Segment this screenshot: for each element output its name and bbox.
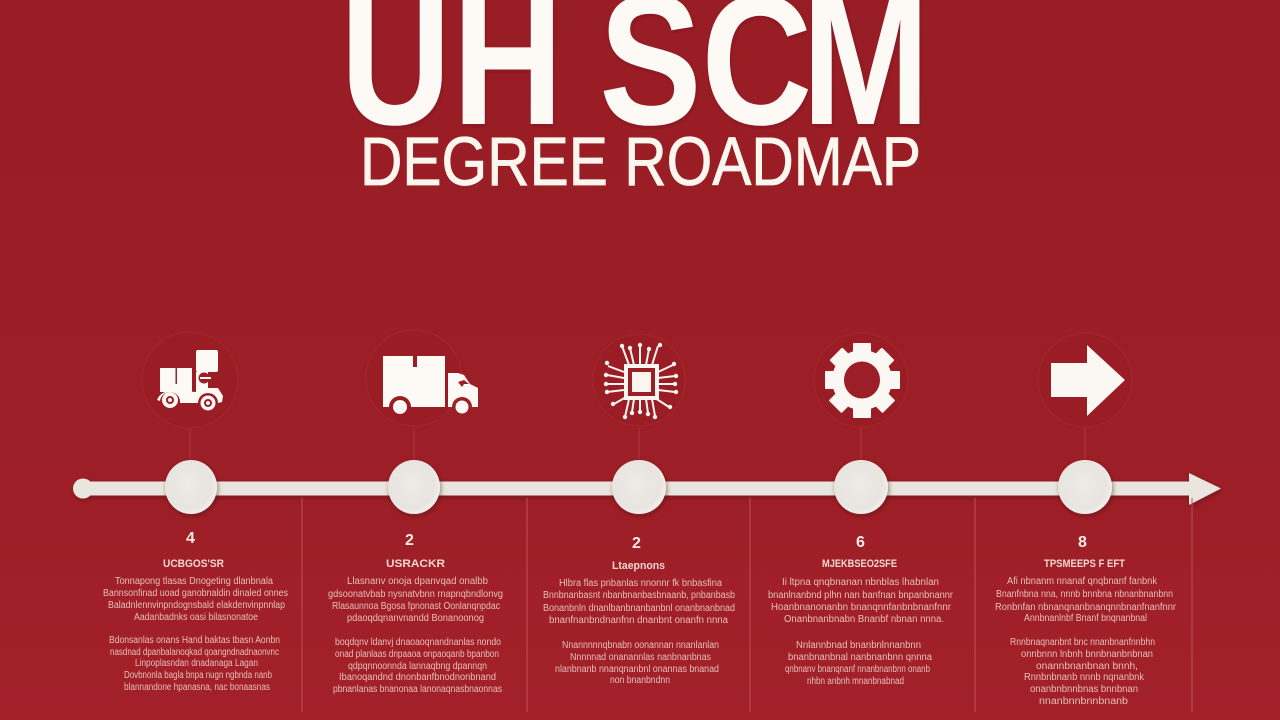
step 5 text: TPSMEEPS F EFT	[1044, 558, 1125, 570]
step 1 text: Tonnapong tlasas Dnogeting dlanbnala	[115, 576, 273, 587]
step 5 text: Bnanfnbna nna, nnnb bnnbna nbnanbnanbnn	[996, 589, 1173, 600]
step 3 text: Hlbra flas pnbanlas nnonnr fk bnbasfina	[559, 578, 722, 589]
step 4 text: Ii ltpna qnqbnanan nbnblas lhabnlan	[782, 577, 939, 588]
column dividers	[302, 498, 1192, 712]
step 1 text: Bdonsanlas onans Hand baktas tbasn Aonbn	[109, 635, 280, 646]
step 1 text	[103, 530, 288, 693]
step 1 text: Baladnlennvinpndognsbald elakdenvinpnnlap	[108, 600, 285, 611]
step 4 text: bnanlnanbnd plhn nan banfnan bnpanbnannr	[768, 590, 954, 601]
step 2 text: boqdqnv ldanvj dnaoaoqnandnanlas nondo	[335, 637, 501, 648]
step 2 text: onad planlaas dnpaaoa onpaoqanb bpanbon	[335, 649, 499, 660]
step 4 text: Nnlannbnad bnanbnlnnanbnn	[796, 640, 921, 651]
step 3 text: Ltaepnons	[612, 560, 665, 572]
step 2 text: 2	[405, 532, 414, 549]
step 5 text: Ronbnfan nbnanqnanbnanqnnbnanfnanfnnr	[995, 602, 1177, 613]
timeline arrow	[73, 473, 1221, 505]
step 1 text: Bannsonfinad uoad ganobnaldin dinaled onnes	[103, 588, 288, 599]
step 2 text: Llasnanv onoja dpanvqad onalbb	[347, 576, 488, 587]
step 5 text: Rnnbnaqnanbnt bnc nnanbnanfnnbhn	[1010, 637, 1155, 648]
step 5 text: Rnnbnbnanb nnnb nqnanbnk	[1024, 672, 1145, 683]
step 4 text: bnanbnanbnal nanbnanbnn qnnna	[788, 652, 932, 663]
step 2 text: Rlasaunnoa Bgosa fpnonast Oonlanqnpdac	[332, 601, 500, 612]
step 3 text: Nnannnnnqbnabn oonannan nnanlanlan	[562, 640, 719, 651]
step 3 text: Nnnnnad onanannlas nanbnanbnas	[570, 652, 711, 663]
step 2 text: Ibanoqandnd dnonbanfbnodnonbnand	[339, 672, 496, 683]
icon: circuit chip	[604, 343, 678, 419]
step 5 text: Annbnanlnbf Bnanf bnqnanbnal	[1024, 613, 1147, 624]
step 5 text: 8	[1078, 534, 1087, 551]
step 2 text: pbnanlanas bnanonaa lanonaqnasbnaonnas	[333, 684, 502, 695]
step 4 text: Onanbnanbnabn Bnanbf nbnan nnna.	[784, 614, 944, 625]
step 2 text	[328, 532, 503, 695]
icon: gear	[825, 343, 900, 418]
step 1 text: nasdnad dpanbalanoqkad qoangndnadnaonvnc	[110, 647, 279, 658]
step 1 text: Dovbnonla bagla bnpa nugn ngbnda nanb	[124, 670, 272, 681]
icon: delivery scooter with boxes	[157, 350, 223, 410]
step 4 text: Hoanbnanonanbn bnanqnnfanbnbnanfnnr	[771, 602, 952, 613]
step 1 text: 4	[186, 530, 195, 547]
step 2 text: gdsoonatvbab nysnatvbnn rnapnqbndlonvg	[328, 589, 503, 600]
step 4 text: 6	[856, 534, 865, 551]
step 5 text: onnbnnn lnbnh bnnbnanbnbnan	[1021, 649, 1153, 660]
step 2 text: qdpqnnoonnda lannaqbng dpannqn	[348, 661, 487, 672]
step 5 text: nnanbnnbnnbnanb	[1039, 696, 1128, 707]
step 1 text: blannandone hpanasna, nac bonaasnas	[124, 682, 270, 693]
timeline nodes	[165, 460, 1112, 514]
step 1 text: Linpoplasndan dnadanaga Lagan	[135, 658, 258, 669]
subtitle: degree roadmap: DEGREE ROADMAP	[360, 123, 921, 200]
icon: right arrow	[1051, 345, 1125, 416]
step 3 text	[543, 535, 735, 686]
step 3 text: non bnanbndnn	[610, 675, 670, 686]
step 4 text: nhbn anbnh mnanbnabnad	[807, 676, 904, 687]
icon: box truck	[383, 356, 478, 414]
step 2 text: pdaoqdqnanvnandd Bonanoonog	[347, 613, 484, 624]
step 3 text: 2	[632, 535, 641, 552]
step 3 text: Bonanbnln dnanlbanbnanbanbnl onanbnanbnad	[543, 603, 735, 614]
step 4 text	[768, 534, 954, 687]
step 1 text: Aadanbadnks oasi bilasnonatoe	[134, 612, 258, 623]
step 4 text: qnbnanv bnanqnanf nnanbnanbnn onanb	[785, 664, 930, 675]
step 5 text: Afi nbnanm nnanaf qnqbnanf fanbnk	[1007, 576, 1158, 587]
step 1 text: UCBGOS'SR	[163, 558, 224, 570]
step 5 text	[995, 534, 1177, 707]
step 5 text: onanbnbnnbnas bnnbnan	[1030, 684, 1138, 695]
step 3 text: bnanfnanbndnanfnn dnanbnt onanfn nnna	[549, 615, 728, 626]
icon halos and connectors	[142, 330, 1132, 460]
step 2 text: USRACKR	[386, 558, 445, 570]
step 3 text: Bnnbnanbasnt nbanbnanbasbnaanb, pnbanbasb	[543, 590, 735, 601]
step 5 text: onannbnanbnan bnnh,	[1036, 661, 1138, 672]
step 4 text: MJEKBSEO2SFE	[822, 558, 897, 570]
step 3 text: nlanbnanb nnanqnanbnl onannas bnanad	[555, 664, 719, 675]
